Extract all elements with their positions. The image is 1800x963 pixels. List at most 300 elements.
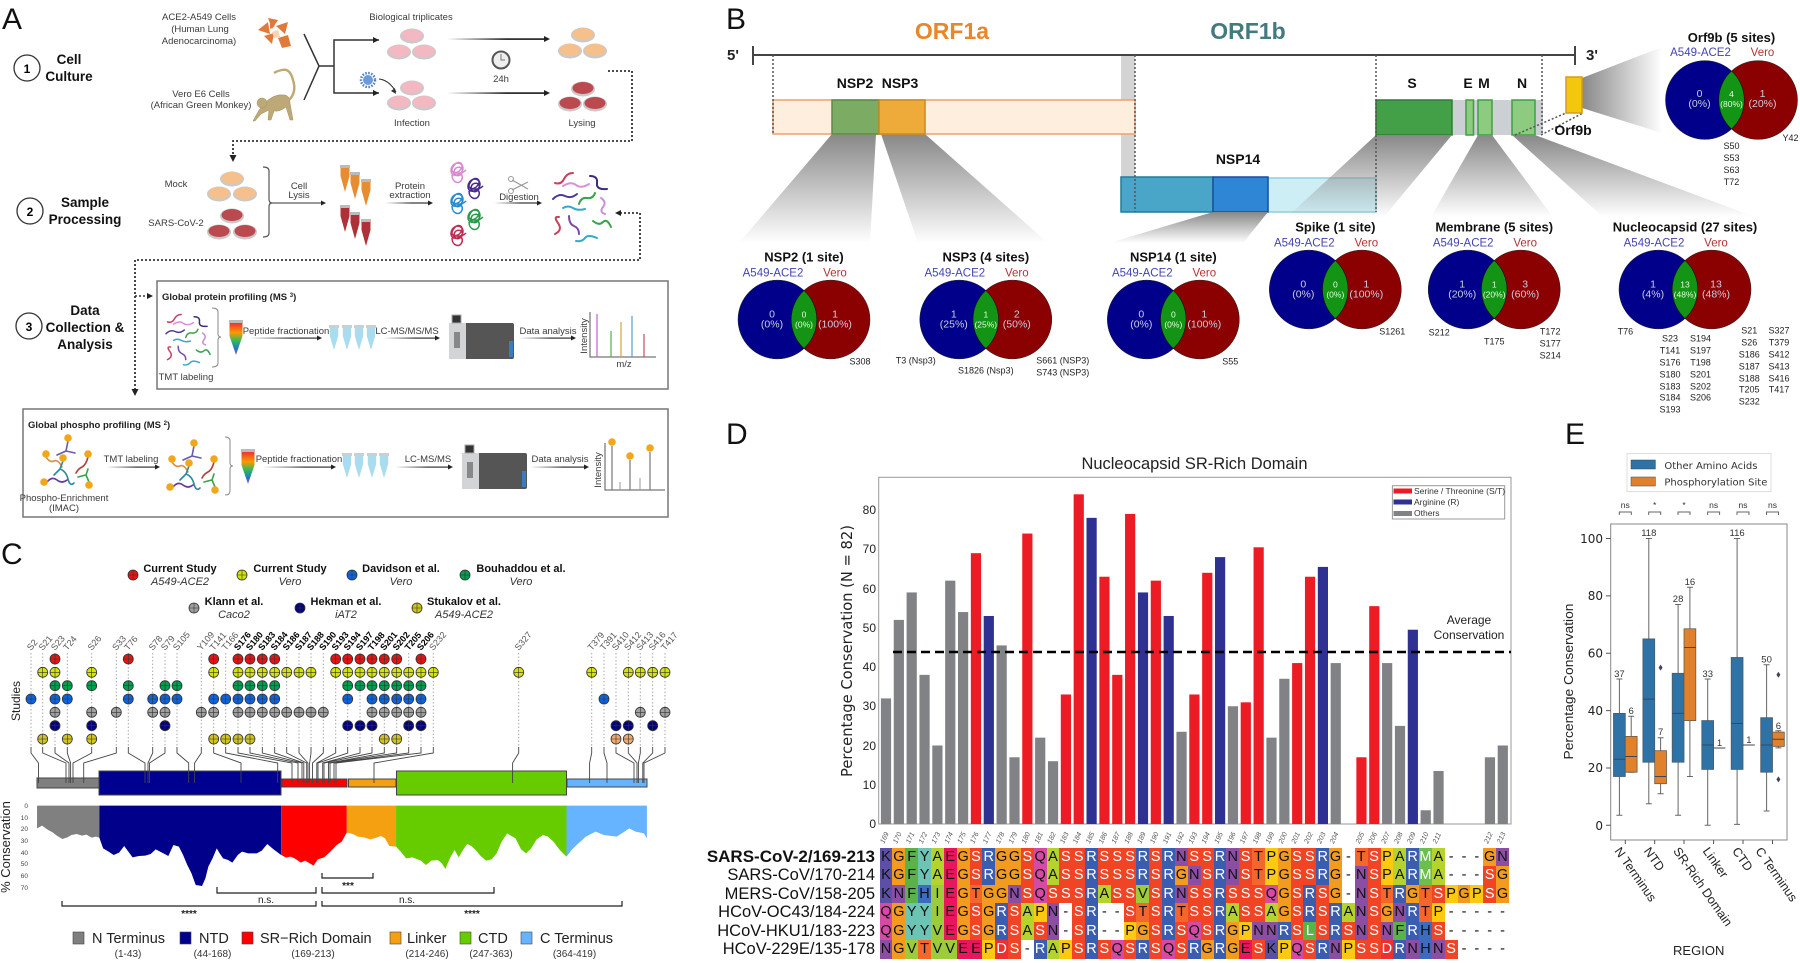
sequence alignment: T	[1357, 848, 1366, 864]
NSP14 bar	[1121, 151, 1376, 212]
Venn: Membrane: S212	[1429, 328, 1450, 338]
sequence alignment: R	[1215, 904, 1225, 920]
site labels: S26	[86, 634, 104, 652]
sequence alignment: Q	[1034, 848, 1046, 864]
genome line with 5' and 3' ends: 5'	[727, 47, 739, 64]
sequence alignment: R	[1395, 941, 1405, 957]
site labels: S413	[634, 630, 655, 652]
sequence alignment: -	[1500, 904, 1505, 920]
sequence alignment: H	[1420, 922, 1431, 938]
sequence names	[707, 846, 875, 958]
sequence alignment: N	[1253, 922, 1264, 938]
sequence alignment: A	[1266, 904, 1276, 920]
sequence alignment: T	[1177, 904, 1186, 920]
sequence alignment: M	[1419, 867, 1432, 883]
fractionation step	[243, 325, 376, 350]
Venn: NSP2: (0%)	[761, 318, 783, 330]
Venn: NSP2	[738, 250, 871, 366]
sequence alignment: G	[1227, 941, 1238, 957]
sequence alignment: S	[1061, 848, 1071, 864]
sequence alignment: K	[881, 867, 891, 883]
labeled peptides: TMT labeling	[159, 372, 213, 383]
site labels: S105	[171, 630, 192, 652]
branch arrowheads	[373, 37, 379, 96]
Nucleocapsid shared sites: T141	[1660, 346, 1680, 356]
sequence alignment: K	[881, 848, 891, 864]
site labels: T76	[122, 634, 140, 652]
sequence alignment: I	[935, 904, 939, 920]
sequence alignment: -	[1102, 922, 1107, 938]
Venn: Orf9b: 4	[1729, 89, 1734, 99]
sample counts	[1614, 528, 1781, 749]
pooled tube	[229, 320, 243, 355]
LC-MS step	[375, 315, 514, 359]
gray bars: other residues	[881, 581, 1508, 824]
sequence alignment: P	[1061, 941, 1071, 957]
sequence alignment: -	[1115, 904, 1120, 920]
sequence alignment: P	[1446, 886, 1456, 902]
residue number labels: 195	[1214, 831, 1225, 845]
sequence names: HCoV-229E/135-178	[723, 940, 875, 958]
y axis: 20	[1588, 761, 1603, 775]
conservation axis: 10	[21, 815, 28, 822]
Venn: Membrane: (20%)	[1448, 288, 1476, 300]
sequence alignment: S	[1074, 886, 1084, 902]
site labels: S79	[159, 634, 177, 652]
sequence alignment: R	[984, 848, 994, 864]
sequence alignment: S	[1074, 941, 1084, 957]
step 3 label: data collection and analysis	[16, 303, 125, 352]
Venn: Spike: 0	[1333, 280, 1338, 290]
residue number labels: 197	[1239, 830, 1251, 845]
Nucleocapsid Vero sites: S187	[1739, 362, 1760, 372]
sequence alignment: G	[893, 941, 904, 957]
average conservation label	[1434, 613, 1504, 642]
sequence alignment: I	[935, 886, 939, 902]
sequence alignment: G	[1279, 904, 1290, 920]
Venn: Nucleocapsid: (4%)	[1642, 288, 1664, 300]
sequence alignment: P	[1266, 848, 1276, 864]
sequence alignment: A	[933, 867, 942, 883]
average conservation label: Average	[1447, 613, 1492, 627]
site labels: S21	[37, 634, 55, 652]
cell line labels: (African Green Monkey)	[151, 100, 251, 111]
Venn: NSP3: 2	[1014, 308, 1020, 320]
site labels: S327	[513, 630, 534, 652]
domain legend: (214-246)	[405, 949, 449, 960]
panel D: SR-rich domain conservation	[726, 418, 1511, 846]
sequence alignment: S	[1485, 886, 1494, 902]
TMT labeling arrow	[104, 454, 160, 470]
Venn: Orf9b: S63	[1723, 165, 1740, 175]
Venn: NSP3: S661 (NSP3)	[1036, 356, 1089, 366]
dotted connector: step 1 to step 2	[230, 71, 632, 162]
Venn: Membrane: A549-ACE2	[1433, 238, 1494, 250]
orange and red dishes	[558, 28, 607, 112]
sequence alignment: R	[1163, 904, 1174, 920]
sequence alignment: R	[1305, 886, 1315, 902]
sample counts: 6	[1629, 706, 1634, 717]
sequence alignment: -	[1474, 848, 1479, 864]
site labels: T198	[366, 630, 387, 652]
sequence alignment: -	[1063, 922, 1068, 938]
Nucleocapsid shared sites: S23	[1662, 334, 1678, 344]
average conservation label: Conservation	[1434, 628, 1504, 642]
lysate tubes	[340, 165, 371, 246]
icon: virus	[361, 73, 396, 94]
residue number labels: 194	[1201, 831, 1212, 845]
structural gene bar with S, E, M, N: E	[1463, 75, 1473, 91]
sequence alignment: -	[1115, 922, 1120, 938]
panel letter B: B	[726, 3, 746, 36]
residue number labels: 202	[1303, 831, 1315, 846]
Venn: NSP3: (25%)	[940, 318, 968, 330]
Nucleocapsid Vero sites: S416	[1768, 374, 1790, 384]
Venn: NSP3: S1826 (Nsp3)	[958, 366, 1014, 376]
sequence alignment: R	[1305, 904, 1315, 920]
sequence alignment: A	[1433, 867, 1443, 883]
sample counts: 50	[1761, 654, 1772, 666]
y axis: 60	[1588, 646, 1603, 660]
Nucleocapsid Vero sites: T379	[1769, 338, 1789, 348]
sequence alignment: -	[1346, 886, 1351, 902]
y axis ticks: 0	[869, 817, 876, 831]
Venn: Spike: Spike (1 site)	[1295, 220, 1375, 234]
y axis	[1580, 532, 1772, 844]
box title: 2	[164, 421, 168, 427]
sequence alignment: P	[1382, 848, 1392, 864]
pooled tube	[241, 449, 255, 484]
residue number labels: 171	[905, 831, 916, 845]
sequence alignment: -	[1462, 867, 1466, 883]
legend	[1627, 454, 1771, 492]
sequence alignment: S	[1100, 867, 1109, 883]
Venn: Spike	[1269, 220, 1405, 336]
y axis ticks: 60	[863, 582, 876, 596]
cell line labels: Adenocarcinoma)	[162, 36, 236, 47]
sequence alignment: R	[1407, 848, 1418, 864]
sequence alignment: Q	[1163, 941, 1174, 957]
sequence alignment: V	[933, 922, 942, 938]
Nucleocapsid shared sites: S202	[1690, 382, 1711, 392]
study legend: iAT2	[335, 609, 357, 621]
NSP14 bar: NSP14	[1216, 151, 1260, 167]
Venn: NSP3: 1	[951, 308, 957, 320]
domain legend: (169-213)	[291, 949, 335, 960]
Venn: NSP14: (100%)	[1187, 318, 1221, 330]
sequence alignment: S	[1125, 867, 1135, 883]
ORF1a bar with NSP2 and NSP3: NSP2	[837, 75, 873, 91]
sequence alignment: G	[1484, 848, 1495, 864]
sequence alignment: P	[1035, 904, 1045, 920]
site labels: S194	[342, 630, 363, 652]
infection and lysing labels: Lysing	[568, 118, 596, 129]
Venn: NSP3	[896, 250, 1089, 378]
domain legend: (364-419)	[553, 949, 596, 960]
sequence alignment: S	[1369, 922, 1379, 938]
Venn: NSP14: 0	[1171, 310, 1176, 320]
sequence alignment: G	[1497, 867, 1508, 883]
panel letter C: C	[1, 538, 23, 571]
sequence alignment: S	[971, 904, 981, 920]
sequence alignment: F	[907, 848, 916, 864]
step 2 label: sample processing	[17, 195, 121, 227]
residue number labels: 170	[892, 831, 904, 845]
phospho-enriched peptides: Phospho-Enrichment	[20, 493, 109, 504]
Venn: NSP2: 1	[832, 308, 838, 320]
sequence alignment: S	[1241, 904, 1250, 920]
sequence alignment: G	[996, 848, 1007, 864]
cell line labels: (Human Lung	[171, 24, 229, 35]
sequence alignment: S	[1228, 886, 1238, 902]
LC-MS step: LC-MS/MS/MS	[375, 326, 439, 337]
Nucleocapsid shared sites: T198	[1690, 358, 1711, 368]
step 3 label: data collection and analysis: 3	[26, 320, 33, 334]
sample counts: 1	[1746, 735, 1752, 746]
sequence alignment: S	[1010, 904, 1019, 920]
sequence alignment: R	[1086, 922, 1097, 938]
Venn: NSP14: 1	[1201, 308, 1207, 320]
sequence alignment: T	[1254, 867, 1263, 883]
conservation axis: 30	[21, 838, 28, 845]
sequence alignment: N	[1356, 904, 1366, 920]
site labels	[25, 630, 680, 652]
y axis ticks: 80	[863, 503, 876, 517]
Venn: Spike: 0	[1300, 278, 1306, 290]
sequence alignment: S	[1035, 922, 1045, 938]
sequence alignment: S	[1125, 941, 1135, 957]
study legend: A549-ACE2	[434, 609, 493, 621]
chart title: Nucleocapsid SR-Rich Domain	[1082, 454, 1308, 473]
residue number labels: 188	[1124, 831, 1135, 845]
domain legend: N Terminus	[92, 931, 165, 947]
Nucleocapsid shared sites: S180	[1659, 370, 1681, 380]
site labels: S206	[415, 630, 436, 652]
sequence alignment: G	[1407, 886, 1418, 902]
Venn: Spike: Vero	[1354, 238, 1378, 250]
site labels: S412	[622, 630, 643, 652]
Venn: Membrane: (60%)	[1511, 288, 1539, 300]
sequence alignment: -	[1474, 922, 1479, 938]
sample counts: 1	[1717, 738, 1722, 749]
Venn: NSP3: 1	[983, 310, 988, 320]
sequence names: SARS-CoV/170-214	[727, 866, 875, 884]
significance labels	[181, 881, 480, 920]
panel letter A: A	[2, 3, 22, 36]
residue number labels: 173	[931, 831, 942, 845]
site labels: S78	[147, 634, 165, 652]
residue number labels: 183	[1059, 831, 1071, 845]
sequence alignment: S	[1125, 904, 1135, 920]
sequence alignment: V	[907, 941, 917, 957]
sequence alignment: S	[1112, 886, 1122, 902]
legend: Phosphorylation Site	[1664, 478, 1767, 488]
site labels: S33	[110, 634, 128, 652]
sequence alignment: S	[1344, 922, 1353, 938]
sequence alignment: V	[945, 941, 955, 957]
sequence alignment: R	[1330, 922, 1341, 938]
residue number labels: 204	[1329, 831, 1341, 846]
domain legend: (44-168)	[194, 949, 231, 960]
residue number labels: 201	[1290, 831, 1302, 846]
sequence alignment: S	[1022, 867, 1032, 883]
bar legend: Arginine (R)	[1414, 497, 1460, 507]
site labels: T379	[586, 630, 606, 652]
Venn: Membrane: 1	[1459, 278, 1465, 290]
site labels: S176	[232, 630, 253, 652]
sequence alignment: R	[1317, 848, 1328, 864]
sequence alignment: G	[1458, 886, 1470, 902]
Venn: Orf9b: Y42	[1782, 133, 1799, 143]
study legend: Davidson et al.	[362, 563, 440, 575]
residue number labels: 210	[1419, 831, 1430, 846]
sequence alignment: S	[1112, 848, 1122, 864]
sequence alignment: T	[1421, 886, 1430, 902]
sequence alignment: S	[1318, 904, 1328, 920]
Venn: NSP14: Vero	[1192, 268, 1216, 280]
Venn: NSP2: (100%)	[818, 318, 852, 330]
Venn: Orf9b: S53	[1723, 153, 1740, 163]
sequence alignment: -	[1462, 904, 1466, 920]
study legend: Vero	[279, 576, 301, 588]
Nucleocapsid shared sites: S193	[1659, 404, 1681, 414]
genome line with 5' and 3' ends: 3'	[1586, 47, 1598, 64]
Venn: Orf9b: 0	[1697, 88, 1703, 100]
study legend: Vero	[510, 576, 532, 588]
sequence alignment: S	[1446, 941, 1456, 957]
sequence alignment: Q	[1189, 922, 1200, 938]
NSP14 wedge	[1109, 212, 1268, 243]
sequence alignment: S	[1189, 904, 1199, 920]
dotted site guides	[31, 653, 665, 747]
sequence alignment: S	[971, 922, 981, 938]
residue number labels: 189	[1136, 831, 1148, 845]
sequence alignment: E	[971, 941, 981, 957]
Venn: Membrane: S214	[1540, 350, 1561, 360]
Venn: Spike: A549-ACE2	[1274, 238, 1335, 250]
sequence alignment: Q	[1112, 941, 1123, 957]
Venn: Orf9b: S50	[1723, 141, 1740, 151]
category labels: NTD	[1641, 845, 1667, 874]
structural gene bar with S, E, M, N: M	[1478, 75, 1490, 91]
sequence alignment: S	[1485, 867, 1494, 883]
structural gene bar with S, E, M, N: N	[1517, 75, 1527, 91]
sequence alignment: S	[1151, 922, 1161, 938]
residue number labels: 185	[1085, 831, 1096, 845]
sequence alignment: S	[1022, 886, 1032, 902]
Venn: NSP14: (0%)	[1164, 320, 1182, 330]
data analysis step	[530, 454, 589, 470]
site labels: T24	[61, 634, 79, 652]
sequence alignment: R	[1035, 941, 1045, 957]
y axis: 100	[1580, 532, 1603, 546]
Venn: Membrane: (20%)	[1483, 290, 1506, 300]
fractionation step	[256, 453, 389, 478]
dotted guides	[773, 55, 1583, 212]
Venn: NSP2: NSP2 (1 site)	[764, 250, 844, 264]
panel A: experimental workflow	[2, 3, 668, 517]
sequence alignment: -	[1474, 941, 1479, 957]
Nucleocapsid shared sites: S183	[1659, 382, 1681, 392]
domain legend: SR−Rich Domain	[260, 931, 372, 947]
y axis ticks	[863, 503, 876, 831]
step 2 label: sample processing: Processing	[49, 212, 121, 227]
residue number labels: 196	[1226, 831, 1238, 845]
Nucleocapsid shared sites: S194	[1690, 334, 1711, 344]
lysis bracket and arrow: Cell	[291, 181, 307, 192]
sequence alignment: S	[1241, 867, 1250, 883]
sample counts: 37	[1614, 669, 1625, 680]
residue number labels: 175	[957, 831, 968, 845]
sequence alignment: S	[1151, 867, 1161, 883]
site connector lines	[31, 747, 665, 783]
Venn: Orf9b: A549-ACE2	[1670, 47, 1731, 59]
Nucleocapsid Vero sites: S327	[1768, 326, 1790, 336]
sequence alignment: Y	[907, 922, 917, 938]
Nucleocapsid Vero sites: S413	[1768, 362, 1790, 372]
sequence alignment: E	[945, 848, 955, 864]
sequence alignment: -	[1346, 848, 1351, 864]
Venn: NSP3: (25%)	[974, 320, 997, 330]
sequence names: SARS-CoV-2/169-213	[707, 846, 875, 866]
dotted connector: step 2 to step 3	[132, 210, 640, 396]
domain legend: (247-363)	[469, 949, 513, 960]
sequence alignment: N	[1395, 904, 1405, 920]
Venn: Nucleocapsid: (48%)	[1702, 288, 1730, 300]
sequence alignment: R	[1215, 886, 1225, 902]
spectrum plot: Intensity	[579, 318, 590, 354]
sequence alignment: N	[1189, 867, 1200, 883]
study legend: Caco2	[218, 609, 250, 621]
sequence alignment: S	[1241, 886, 1250, 902]
sequence alignment: A	[1344, 904, 1353, 920]
sequence alignment: S	[1010, 941, 1019, 957]
Venn: Orf9b: Orf9b (5 sites)	[1688, 30, 1775, 45]
sequence alignment: S	[1318, 922, 1328, 938]
sequence alignment: G	[893, 867, 904, 883]
phospho-enriched peptides	[20, 434, 109, 514]
sequence alignment: S	[1305, 867, 1315, 883]
branching bracket	[304, 34, 379, 100]
spectrum plot	[579, 312, 656, 370]
digested peptides	[553, 173, 611, 241]
sequence alignment: G	[983, 922, 994, 938]
sequence alignment: L	[1306, 922, 1314, 938]
plot frame	[879, 477, 1511, 824]
sequence alignment: -	[1449, 904, 1454, 920]
sequence alignment: -	[1449, 848, 1454, 864]
digestion arrow and scissors	[494, 176, 542, 206]
sequence alignment: S	[1151, 941, 1161, 957]
sequence alignment: R	[1163, 848, 1174, 864]
sequence alignment: K	[881, 886, 891, 902]
red bars: serine and threonine	[971, 494, 1379, 824]
Nucleocapsid Vero sites: S21	[1741, 326, 1757, 336]
sequence alignment: R	[1086, 941, 1097, 957]
significance labels: ***	[342, 881, 354, 892]
sequence alignment: N	[894, 886, 904, 902]
significance markers: ns	[1709, 500, 1718, 510]
ORF1b label: ORF1b	[1210, 18, 1286, 44]
sequence alignment: F	[907, 886, 916, 902]
biological triplicates label: Biological triplicates	[369, 12, 453, 23]
sequence alignment: S	[1433, 922, 1443, 938]
sequence alignment: A	[1395, 848, 1405, 864]
site labels: S2	[25, 637, 40, 652]
sequence alignment: S	[971, 848, 981, 864]
Nucleocapsid shared sites: S206	[1690, 392, 1711, 402]
panel E: box plots	[1561, 418, 1800, 958]
